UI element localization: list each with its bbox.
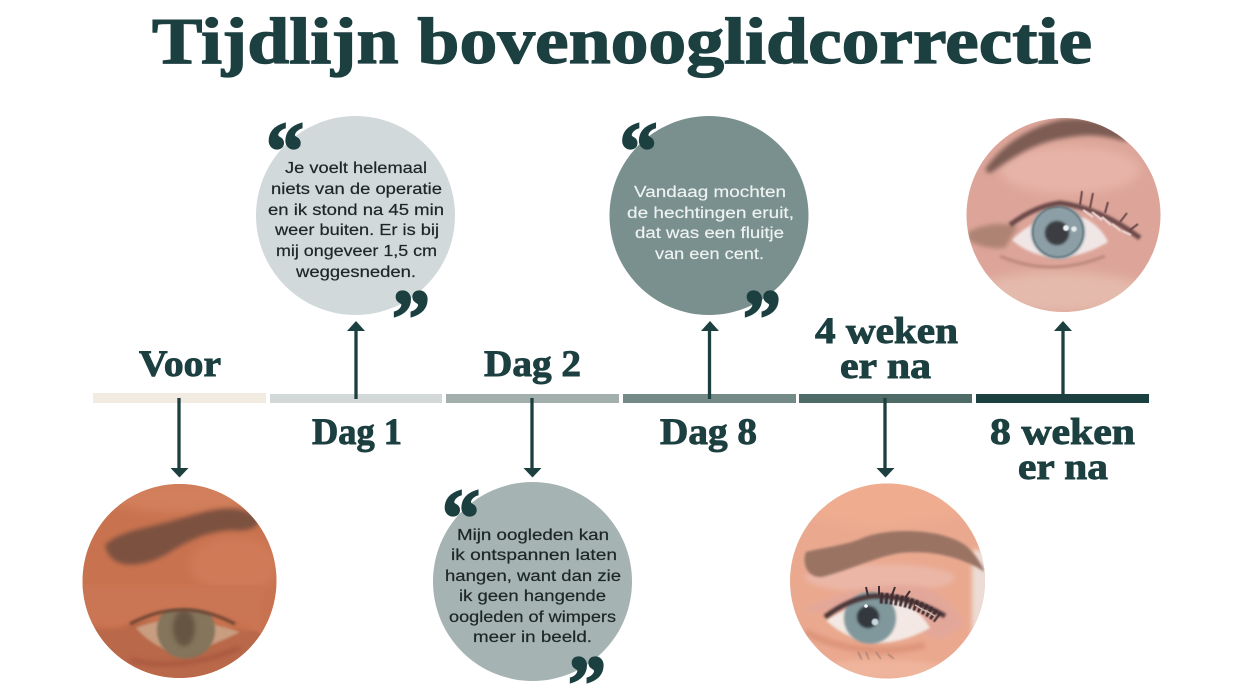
closing quote mark: ”: [392, 273, 430, 364]
quote text: de hechtingen eruit,: [627, 205, 794, 222]
quote text: hangen, want dan zie: [445, 568, 621, 585]
arrow: Dag 2 down: [524, 398, 542, 478]
arrow: Voor down: [170, 398, 188, 478]
photo: eye after 8 weeks: [966, 118, 1160, 312]
label: Dag 2: Dag 2: [484, 344, 581, 385]
label: Voor: Voor: [139, 344, 221, 385]
bubble: [610, 116, 808, 315]
quote text: ik ontspannen laten: [451, 547, 617, 564]
panel: Dag 1 quote: [256, 105, 455, 364]
title: Tijdlijn bovenooglidcorrectie: [152, 5, 1092, 78]
bubble: [433, 482, 632, 681]
arrow: Dag 8 up: [701, 321, 719, 399]
quote text: dat was een fluitje: [635, 225, 784, 242]
label: Dag 1: Dag 1: [312, 412, 402, 453]
photo: eye after 4 weeks: [790, 484, 985, 678]
quote text: meer in beeld.: [473, 629, 592, 646]
panel: Dag 2 quote: [433, 472, 632, 700]
label: 4 weken er na: 4 weken: [815, 311, 958, 352]
timeline bar: [93, 393, 1149, 403]
arrow: 4 weken down: [876, 398, 894, 478]
label: 4 weken er na: er na: [840, 346, 931, 387]
quote text: en ik stond na 45 min: [268, 202, 444, 219]
photo: eye before: [80, 480, 280, 680]
closing quote mark: ”: [743, 273, 781, 364]
quote text: mij ongeveer 1,5 cm: [276, 243, 437, 260]
bubble: [256, 116, 455, 315]
quote text: ik geen hangende: [459, 588, 606, 605]
opening quote mark: “: [442, 472, 480, 563]
quote text: [445, 527, 621, 646]
panel: Dag 8 quote: [610, 105, 808, 364]
opening quote mark: “: [620, 105, 658, 196]
quote text: oogleden of wimpers: [449, 609, 616, 626]
quote text: [627, 184, 794, 263]
quote text: van een cent.: [655, 246, 764, 263]
label: 8 weken er na: 8 weken: [990, 412, 1135, 453]
quote text: [268, 160, 444, 281]
quote text: Mijn oogleden kan: [457, 527, 609, 544]
arrow: Dag 1 up: [347, 321, 365, 399]
quote text: niets van de operatie: [271, 181, 442, 198]
opening quote mark: “: [266, 105, 304, 196]
quote text: Vandaag mochten: [634, 184, 786, 201]
arrow: 8 weken up: [1054, 321, 1072, 395]
label: Dag 8: Dag 8: [660, 412, 757, 453]
quote text: weer buiten. Er is bij: [274, 222, 439, 239]
label: 8 weken er na: er na: [1018, 447, 1108, 488]
label: 8 weken er na: [990, 412, 1135, 488]
label: 4 weken er na: [815, 311, 958, 387]
quote text: weggesneden.: [295, 264, 416, 281]
quote text: Je voelt helemaal: [285, 160, 427, 177]
